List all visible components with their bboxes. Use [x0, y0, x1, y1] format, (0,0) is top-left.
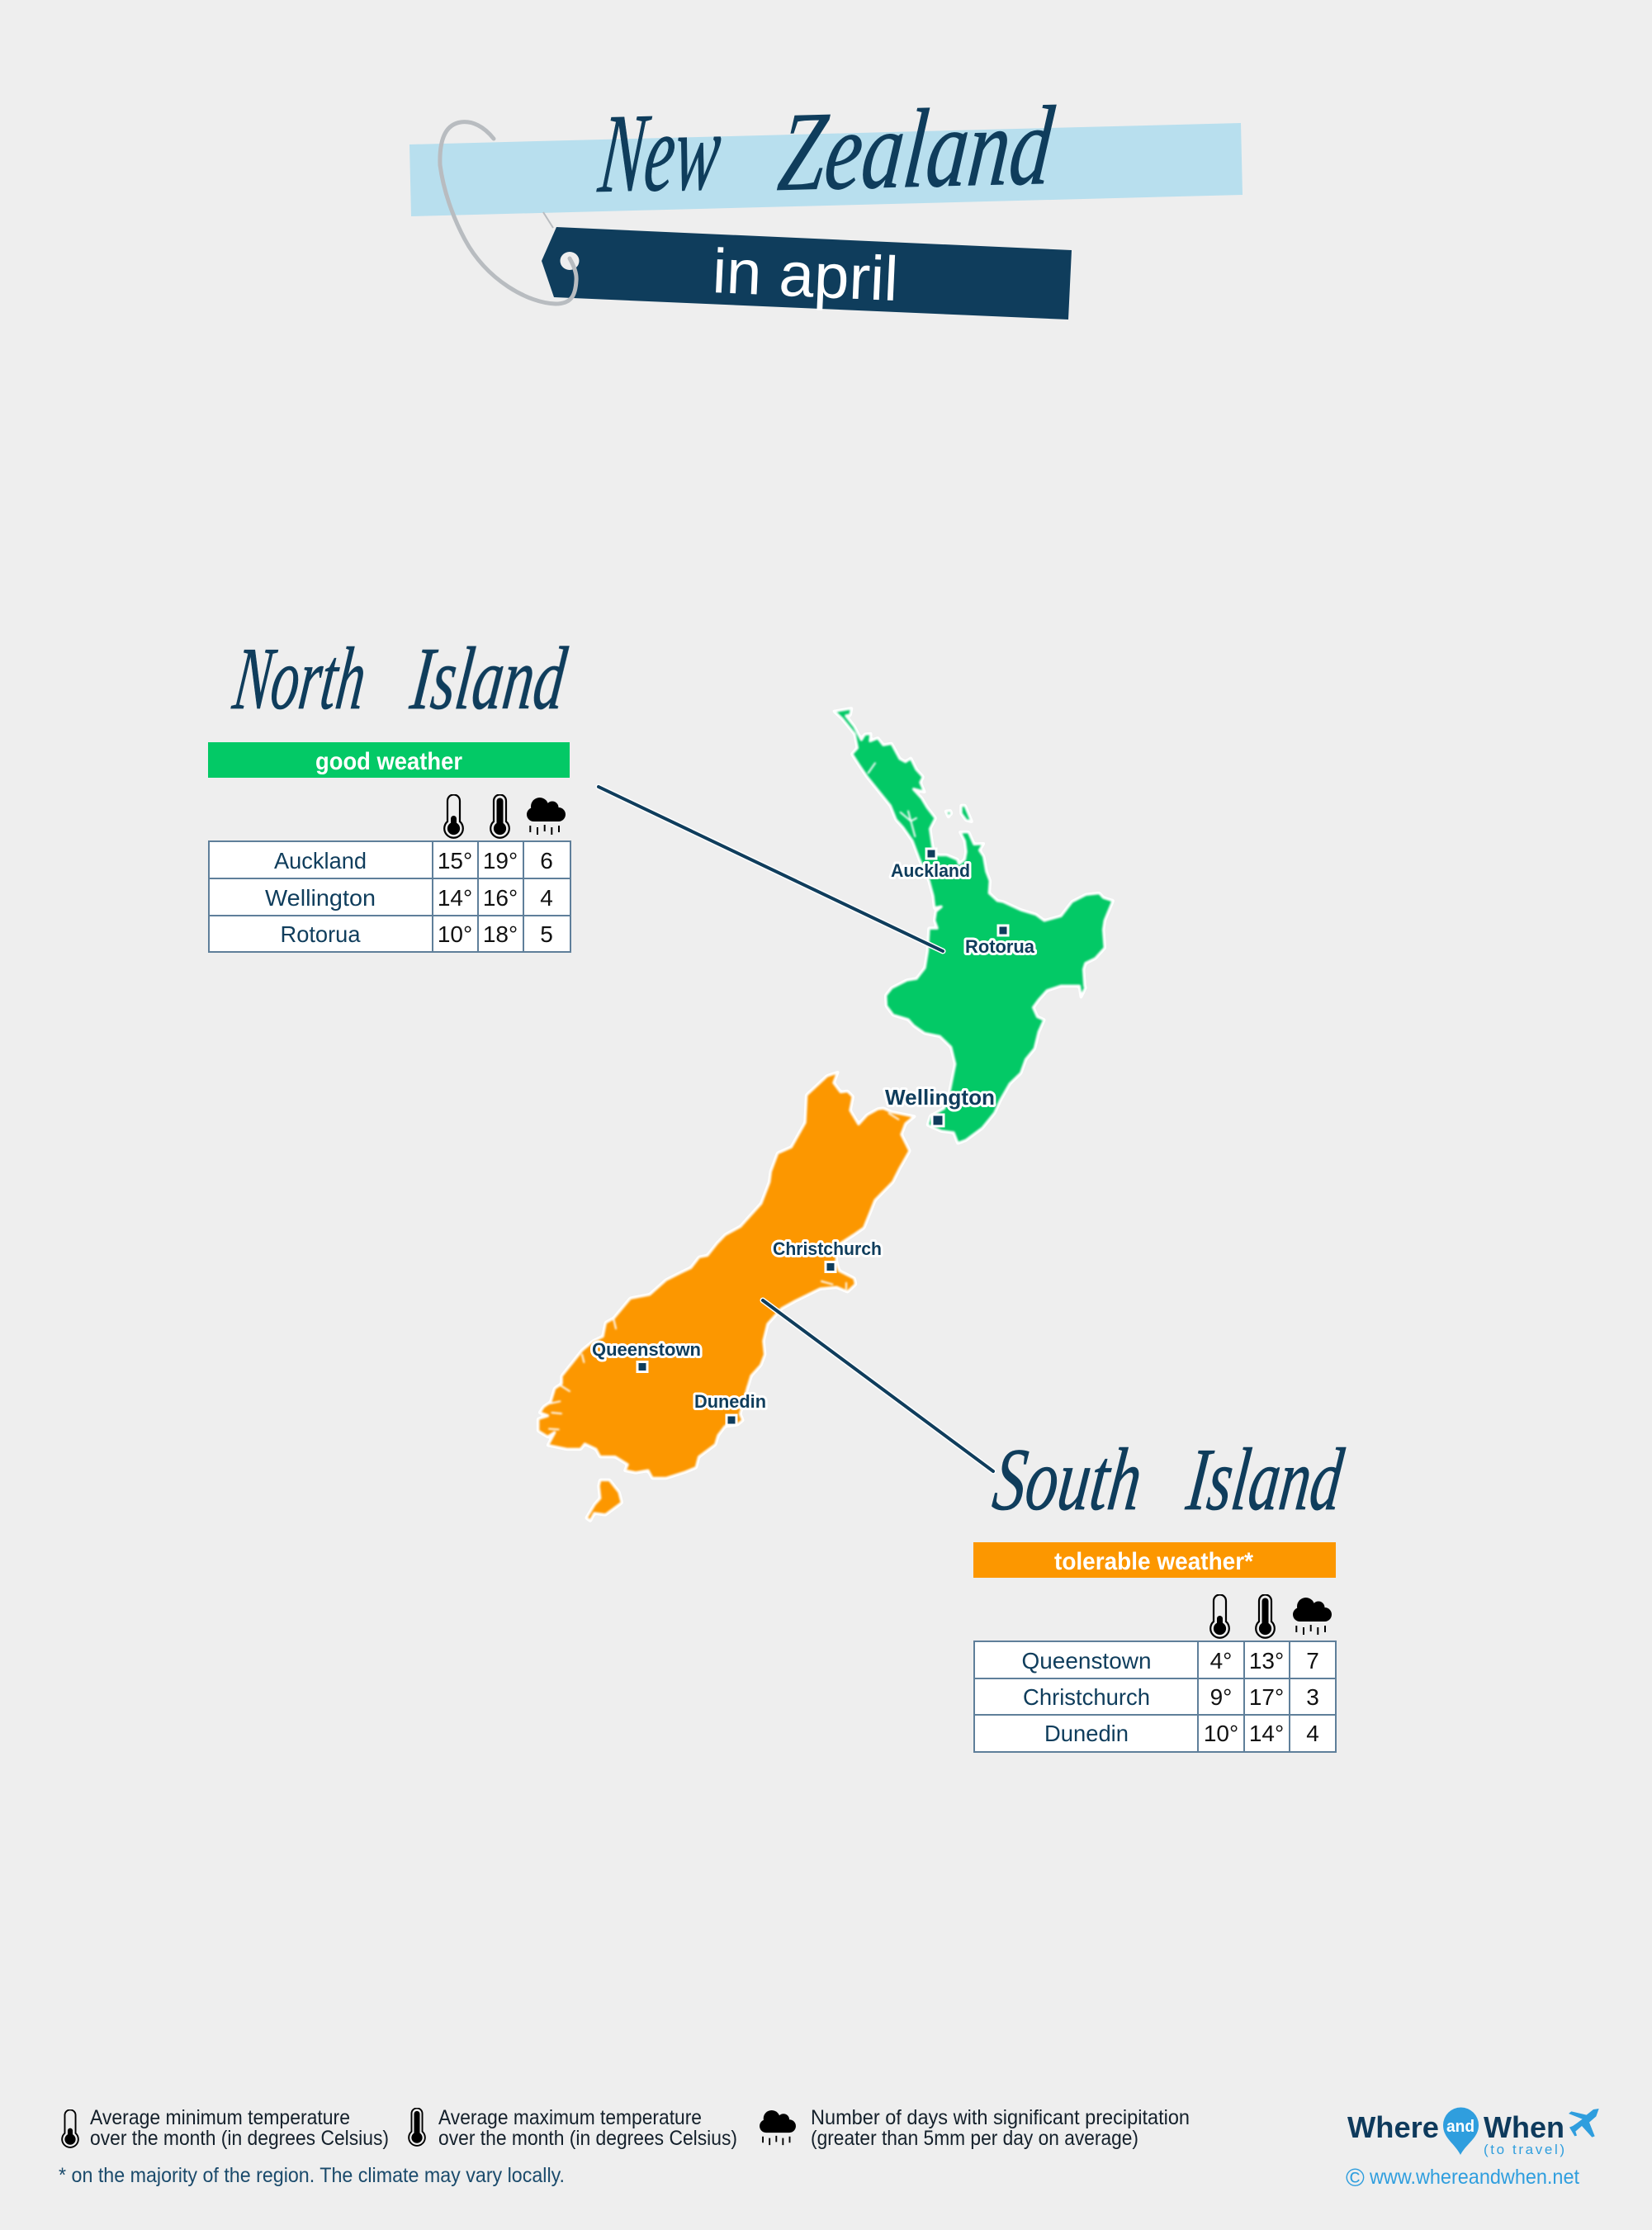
table: South Island cities: 3	[1306, 1684, 1319, 1710]
leader line navy: North Island	[599, 787, 943, 951]
table: South Island cities: 9°	[1210, 1684, 1232, 1710]
logo tagline: (to travel)	[1484, 2142, 1564, 2157]
table: North Island cities: 18°	[483, 921, 518, 947]
map of New Zealand	[538, 708, 1113, 1521]
land masses	[538, 708, 1113, 1521]
city: Christchurch: Christchurch	[773, 1238, 882, 1259]
panel: South Island	[973, 1430, 1348, 1752]
footnote: * on the majority of the region. The climate may vary locally.	[59, 2164, 565, 2187]
North Island	[834, 708, 1113, 1143]
heading: South Island: Island	[1181, 1430, 1348, 1528]
city: Rotorua: Rotorua	[965, 936, 1035, 957]
table: North Island cities: 5	[540, 921, 553, 947]
table: South Island cities: 4	[1306, 1721, 1319, 1746]
table: South Island cities: Christchurch	[1023, 1684, 1150, 1710]
table: South Island cities: 14°	[1249, 1721, 1284, 1746]
legend icon: rain days	[760, 2110, 796, 2145]
legend text: rain days: Number of days with significant precipitation	[811, 2106, 1190, 2129]
table: South Island cities: 13°	[1249, 1648, 1284, 1674]
legend icon: minimum temperature	[62, 2109, 78, 2147]
light blue band	[409, 123, 1243, 216]
table: North Island cities: 16°	[483, 885, 518, 911]
title: New Zealand: New	[594, 88, 727, 216]
string curve	[440, 122, 576, 304]
website: www.whereandwhen.net	[1369, 2166, 1579, 2189]
table: North Island cities: 14°	[438, 885, 472, 911]
table: North Island cities: 19°	[483, 848, 518, 874]
icon: minimum temperature	[1210, 1595, 1229, 1638]
logo word: When: When	[1484, 2110, 1564, 2144]
leader line: South Island	[763, 1300, 993, 1471]
table: North Island cities: 6	[540, 848, 553, 874]
icon: rain days	[527, 798, 566, 835]
luggage tag string, back part	[543, 212, 553, 228]
title: New Zealand	[594, 83, 1058, 216]
heading: South Island: South	[988, 1430, 1148, 1528]
legend text: maximum temperature: Average maximum temperature	[438, 2106, 702, 2129]
rating bar: tolerable weather	[973, 1542, 1336, 1578]
legend text: maximum temperature	[438, 2106, 737, 2150]
table: South Island cities	[974, 1641, 1336, 1752]
heading: North Island: North	[228, 629, 372, 727]
table: North Island cities: Auckland	[274, 848, 367, 874]
table: South Island cities: Queenstown	[1022, 1648, 1151, 1674]
title: New Zealand: Zealand	[774, 83, 1058, 215]
icon: maximum temperature	[1256, 1595, 1275, 1638]
table: North Island cities: Rotorua	[281, 921, 361, 947]
icon: maximum temperature	[490, 794, 509, 838]
table: North Island cities: 10°	[438, 921, 472, 947]
icon: minimum temperature	[444, 794, 463, 838]
legend	[59, 2106, 1190, 2187]
legend text: rain days: (greater than 5mm per day on average)	[811, 2127, 1138, 2150]
rating bar: good weather: good weather	[315, 748, 462, 775]
table: South Island cities: Dunedin	[1044, 1721, 1129, 1746]
rating bar: tolerable weather: tolerable weather*	[1054, 1548, 1253, 1575]
dark blue tag	[542, 227, 1072, 320]
icon: rain days	[1293, 1598, 1332, 1635]
logo word: Where: Where	[1347, 2110, 1439, 2144]
logo: Where and When	[1346, 2107, 1599, 2192]
table: South Island cities: 17°	[1249, 1684, 1284, 1710]
legend icon: maximum temperature	[409, 2108, 425, 2146]
legend text: minimum temperature: Average minimum temperature	[90, 2106, 350, 2129]
legend text: minimum temperature	[90, 2106, 389, 2150]
city: Dunedin	[694, 1391, 766, 1425]
leader line navy: South Island	[763, 1300, 993, 1471]
city: Wellington	[885, 1085, 995, 1126]
heading: North Island	[228, 629, 571, 727]
panel: North Island	[208, 629, 571, 952]
copyright symbol: ©	[1346, 2163, 1365, 2192]
table: North Island cities	[209, 841, 570, 952]
logo word: and: and	[1446, 2118, 1474, 2136]
table: North Island cities: 4	[540, 885, 553, 911]
rating bar: good weather	[208, 742, 570, 778]
icon: plane	[1569, 2109, 1599, 2138]
city: Auckland	[891, 849, 970, 881]
tag hole	[560, 252, 580, 270]
table: North Island cities: 15°	[438, 848, 472, 874]
table: South Island cities: 10°	[1204, 1721, 1238, 1746]
legend text: maximum temperature: over the month (in degrees Celsius)	[438, 2127, 737, 2150]
table: North Island cities: Wellington	[265, 885, 376, 911]
city: Dunedin: Dunedin	[694, 1391, 766, 1412]
leader line: North Island	[599, 787, 943, 951]
city: Wellington: Wellington	[885, 1085, 995, 1110]
heading: North Island: Island	[405, 629, 571, 727]
legend text: rain days	[811, 2106, 1190, 2150]
subtitle: in april: in april	[711, 236, 900, 315]
South Island	[538, 1072, 915, 1521]
heading: South Island	[988, 1430, 1348, 1528]
city: Queenstown	[592, 1339, 701, 1372]
title banner	[409, 83, 1243, 320]
city: Rotorua	[965, 926, 1035, 957]
table: South Island cities: 7	[1306, 1648, 1319, 1674]
logo pin	[1443, 2107, 1479, 2155]
city: Queenstown: Queenstown	[592, 1339, 701, 1360]
city: Auckland: Auckland	[891, 860, 970, 881]
legend text: minimum temperature: over the month (in degrees Celsius)	[90, 2127, 389, 2150]
table: South Island cities: 4°	[1210, 1648, 1232, 1674]
city: Christchurch	[773, 1238, 882, 1271]
